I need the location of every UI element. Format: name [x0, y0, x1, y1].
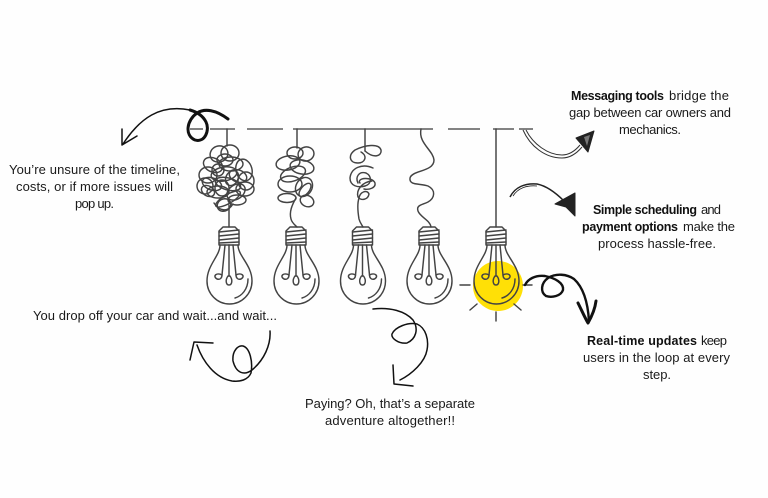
bulb 3 with light tangle — [350, 129, 381, 227]
arrow: wait loop — [190, 331, 270, 381]
text: simple scheduling: make the — [683, 219, 735, 234]
text: paying: adventure altogether!! — [325, 413, 455, 428]
text: messaging tools: mechanics. — [619, 122, 681, 137]
bulb 3 — [340, 227, 386, 304]
text: simple scheduling — [582, 202, 735, 251]
text: drop off your car: You drop off your car and wait...and wait... — [33, 308, 277, 323]
arrow: paying loop — [373, 308, 428, 386]
text: real-time updates: keep — [701, 333, 727, 348]
dashed wire — [190, 128, 533, 130]
arrow: double line to messaging tools — [523, 130, 594, 158]
text: unsure of the timeline: You’re unsure of the timeline, — [9, 162, 180, 177]
bulb 5 lit — [474, 227, 519, 304]
text: real-time updates: Real-time updates — [587, 334, 697, 348]
text: simple scheduling: and — [701, 202, 721, 217]
bulb 1 — [207, 227, 252, 304]
text: simple scheduling: payment options — [582, 220, 678, 234]
text: unsure of the timeline: costs, or if more issues will — [16, 179, 173, 194]
bulb 4 — [407, 227, 452, 304]
text: messaging tools: gap between car owners and — [569, 105, 731, 120]
arrow: to simple scheduling — [510, 184, 575, 216]
text: paying — [305, 396, 475, 428]
text: simple scheduling: Simple scheduling — [593, 203, 697, 217]
text: unsure of the timeline — [9, 162, 180, 211]
bulb 5 straight cord — [495, 129, 497, 227]
text: simple scheduling: process hassle-free. — [598, 236, 716, 251]
arrow: loop to real-time updates — [525, 275, 596, 323]
bulb 1 with heavy tangle — [197, 129, 255, 227]
bulb 2 with medium tangle — [275, 129, 316, 227]
text: real-time updates: users in the loop at every — [583, 350, 730, 365]
text: messaging tools — [569, 88, 731, 137]
text: messaging tools: Messaging tools — [571, 89, 664, 103]
text: paying: Paying? Oh, that’s a separate — [305, 396, 475, 411]
bulb 2 — [274, 227, 319, 304]
icon: yellow glow behind lit bulb — [473, 261, 523, 311]
text: real-time updates — [583, 333, 730, 382]
bulb 4 with wavy cord — [410, 129, 434, 227]
text: unsure of the timeline: pop up. — [75, 196, 114, 211]
text: real-time updates: step. — [643, 367, 671, 382]
arrow: loop to unsure text — [122, 109, 228, 145]
icon: light rays — [460, 285, 532, 321]
text: messaging tools: bridge the — [669, 88, 729, 103]
